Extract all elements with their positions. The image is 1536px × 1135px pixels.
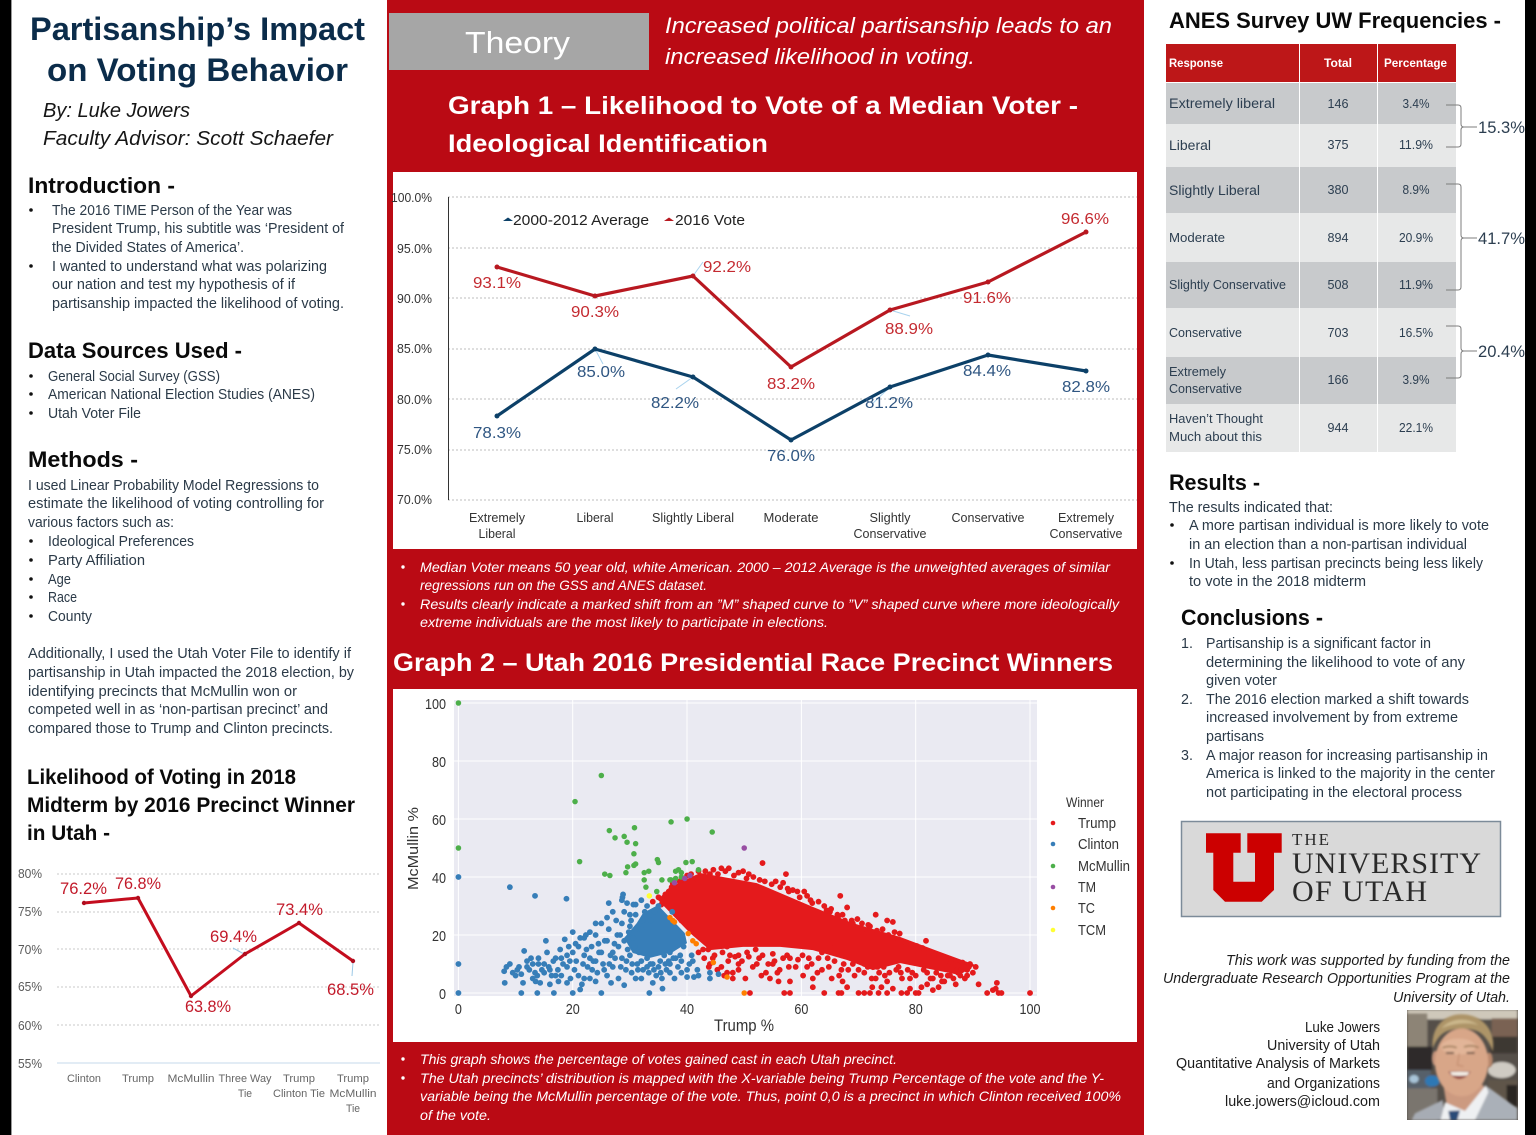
bracket: 15.3% [1446,105,1525,147]
text block: conclusions: 1. [1181,636,1193,652]
text block: methods: compared those to Trump and Clinton precincts. [28,721,333,737]
legend: 2016 Vote [675,212,745,229]
table: ANES frequencies: Conservative [1169,325,1242,340]
heading: conclusions: Conclusions - [1181,605,1323,630]
text block: funding acknowledgement: Undergraduate Research Opportunities Program at the [1163,971,1510,987]
text block: conclusions: not participating in the electoral process [1206,785,1462,801]
scatter plot: graph 2: 0 [439,986,446,1003]
scatter plot: graph 2: 80 [909,1001,923,1018]
line chart: 2018 midterm likelihood: 70% [18,943,42,957]
text block: methods: estimate the likelihood of voting controlling for [28,496,324,512]
scatter plot: graph 2: 40 [680,1001,694,1018]
legend: TC [1078,900,1095,917]
series: 2000-2012 average [494,346,1088,442]
scatter plot: graph 2: 40 [432,870,446,887]
theory statement [665,13,1112,69]
text block: conclusions: partisans [1206,729,1264,745]
table: ANES frequencies: 22.1% [1399,421,1433,435]
text block: data sources list: American National Election Studies (ANES) [48,387,315,403]
series: 2016 vote [494,230,1088,370]
text block: data sources list [29,369,315,422]
title: on Voting Behavior [47,52,348,88]
text block: conclusions: determining the likelihood to vote of any [1206,655,1466,671]
line chart: graph 1: 85.0% [397,342,432,356]
line chart: 2018 midterm likelihood: 76.2% [60,880,107,898]
bracket: 20.4%: 20.4% [1478,342,1525,361]
text block: contact: luke.jowers@icloud.com [1225,1094,1380,1110]
legend [1051,794,1130,939]
text block: conclusions: 3. [1181,748,1193,764]
table: ANES frequencies: 3.9% [1402,373,1430,387]
title: Partisanship’s Impact [30,11,365,47]
line chart: graph 1: 91.6% [963,290,1011,307]
portrait [1407,1010,1518,1120]
line chart: graph 1: 80.0% [397,393,432,407]
scatter plot: graph 2: 20 [432,928,446,945]
table: ANES frequencies [1166,44,1456,452]
title [30,11,365,88]
text block: contact: and Organizations [1267,1076,1380,1092]
bracket: 41.7% [1446,184,1525,290]
line chart: graph 1: 90.3% [571,304,619,321]
line chart: graph 1: 95.0% [397,242,432,256]
theory badge: Theory [465,25,571,60]
line chart: graph 1: Slightly [870,511,911,525]
bracket: 41.7%: 41.7% [1478,229,1525,248]
text block: methods: I used Linear Probability Model Regressions to [28,478,319,494]
panel: center red [387,0,1144,1135]
table: ANES frequencies: 11.9% [1399,278,1433,292]
theory statement: increased likelihood in voting. [665,44,975,69]
text block: methods: identifying precincts that McMullin won or [28,684,297,700]
table: ANES frequencies: 894 [1328,231,1349,245]
table: ANES frequencies: 375 [1328,138,1349,152]
text block: conclusions: Partisanship is a significant factor in [1206,636,1431,652]
scatter plot: graph 2: 60 [794,1001,808,1018]
bracket: 15.3%: 15.3% [1478,118,1525,137]
text block: graph 2 notes [401,1051,1121,1123]
table: ANES frequencies: 703 [1328,326,1349,340]
heading: data sources: Data Sources Used - [28,338,242,363]
legend: Winner [1066,794,1104,810]
table: ANES frequencies: Total [1324,56,1352,70]
line chart: 2018 midterm likelihood: Trump [122,1073,154,1085]
text block: graph 1 notes: Results clearly indicate a marked shift from an ”M” shaped curve to ”V” shaped curve where more ideologically [420,596,1120,612]
line chart: 2018 midterm likelihood [18,867,380,1115]
text block: introduction bullets: our nation and test my hypothesis of if [52,277,295,293]
text block: conclusions: given voter [1206,673,1277,689]
legend [503,212,745,229]
logo: University of Utah: OF UTAH [1292,875,1427,908]
line chart: graph 1: Liberal [576,511,614,525]
scatter plot: graph 2: 100 [425,696,446,713]
text block: funding acknowledgement: University of Utah. [1393,990,1510,1006]
legend: TCM [1078,922,1106,939]
heading: methods: Methods - [28,447,138,472]
line chart: 2018 midterm likelihood: 68.5% [327,981,374,999]
line chart: graph 1 [391,172,1137,549]
text block: results: The results indicated that: [1169,500,1333,516]
text block: methods: competed well in as ‘non-partisan precinct’ and [28,702,328,718]
text block: graph 2 notes: variable being the McMullin percentage of the vote. Thus, point 0,0 is a precinct in which Clinton received 100% [420,1088,1121,1104]
line chart: graph 1: Slightly Liberal [652,511,734,525]
table: ANES frequencies: 16.5% [1399,326,1433,340]
text block: graph 2 notes: This graph shows the percentage of votes gained cast in each Utah precinct. [420,1051,897,1067]
text block: methods [28,478,355,737]
line chart: 2018 midterm likelihood: 80% [18,867,42,881]
theory badge [389,13,649,70]
line chart: graph 1: Moderate [764,511,819,525]
line chart: graph 1: 96.6% [1061,211,1109,228]
line chart: graph 1: 76.0% [767,448,815,465]
line chart: graph 1: Extremely [469,511,526,525]
table: ANES frequencies: Extremely liberal [1169,96,1275,111]
heading: likelihood of voting chart: in Utah - [27,822,110,845]
text block: methods: various factors such as: [28,515,174,531]
scatter plot: graph 2: 20 [566,1001,580,1018]
line chart: 2018 midterm likelihood: Three Way [218,1073,272,1085]
heading: likelihood of voting chart: Likelihood of Voting in 2018 [27,766,296,789]
text block: conclusions: America is linked to the majority in the center [1206,766,1495,782]
text block: methods: Ideological Preferences [48,534,194,550]
table: ANES frequencies: Response [1169,56,1223,70]
line chart: 2018 midterm likelihood: 60% [18,1019,42,1033]
scatter plot: graph 2: 100 [1020,1001,1040,1018]
text block: graph 1 notes: regressions run on the GSS and ANES dataset. [420,577,707,593]
text block: conclusions: 2. [1181,692,1193,708]
table: ANES frequencies: Liberal [1169,138,1211,153]
heading: introduction: Introduction - [28,173,175,198]
logo: University of Utah: THE [1292,830,1329,849]
line chart: graph 1: Extremely [1058,511,1115,525]
line chart: graph 1: 93.1% [473,275,521,292]
table: ANES frequencies: Percentage [1384,56,1447,70]
line chart: graph 1: 84.4% [963,363,1011,380]
line chart: graph 1: Conservative [952,511,1025,525]
line chart: graph 1: 83.2% [767,376,815,393]
text block: contact [1176,1020,1380,1110]
text block: introduction bullets: The 2016 TIME Person of the Year was [52,203,292,219]
heading: graph 1 [448,92,1078,158]
logo: University of Utah [1182,822,1500,916]
scatter plot: graph 2: 0 [455,1001,462,1018]
text block: graph 1 notes: Median Voter means 50 year old, white American. 2000 – 2012 Average is the unweighted averages of similar [420,559,1111,575]
line chart: 2018 midterm likelihood: McMullin [330,1088,376,1100]
table: ANES frequencies: Haven’t Thought [1169,411,1263,426]
text block: methods: partisanship in Utah impacted the 2018 election, by [28,665,355,681]
heading: graph 1: Ideological Identification [448,130,768,158]
panel: right column [1163,8,1525,1125]
table: ANES frequencies: Slightly Conservative [1169,277,1286,292]
line chart: graph 1: Conservative [854,527,927,541]
line chart: 2018 midterm likelihood: Clinton [67,1073,101,1085]
theory statement: Increased political partisanship leads to an [665,13,1112,38]
table: ANES frequencies: 166 [1328,373,1349,387]
line chart: 2018 midterm likelihood: Trump [283,1073,315,1085]
scatter plot: graph 2: Trump % [714,1016,774,1035]
text block: introduction bullets [29,203,344,312]
table: ANES frequencies: 508 [1328,278,1349,292]
table: ANES frequencies: Extremely [1169,364,1226,379]
line chart: 2018 midterm likelihood: 55% [18,1057,42,1071]
heading: likelihood of voting chart [27,766,355,845]
line chart: graph 1: 78.3% [473,425,521,442]
text block: graph 2 notes: of the vote. [420,1107,491,1123]
text block: introduction bullets: the Divided States of America’. [52,240,244,256]
authors: Faculty Advisor: Scott Schaefer [43,127,334,150]
heading: likelihood of voting chart: Midterm by 2016 Precinct Winner [27,794,355,817]
bracket: 20.4% [1446,326,1525,378]
line chart: graph 1: 75.0% [397,443,432,457]
line chart: 2018 midterm likelihood: 65% [18,980,42,994]
line chart: graph 1: Liberal [478,527,516,541]
line chart: graph 1: 90.0% [397,292,432,306]
dots [458,703,1030,993]
text block: graph 1 notes [401,559,1120,630]
legend: TM [1078,879,1096,896]
table: ANES frequencies: 8.9% [1402,183,1430,197]
text block: methods: Race [48,590,77,606]
line chart: graph 1: 100.0% [391,191,432,205]
logo: University of Utah: UNIVERSITY [1292,847,1481,880]
line chart: 2018 midterm likelihood: 75% [18,905,42,919]
text block: conclusions [1181,636,1495,801]
authors: By: Luke Jowers [43,99,190,122]
text block: methods: Age [48,572,71,588]
line chart: graph 1: 82.8% [1062,379,1110,396]
legend: Clinton [1078,836,1119,853]
line chart: 2018 midterm likelihood: 76.8% [115,875,161,893]
text block: graph 1 notes: extreme individuals are the most likely to participate in elections. [420,614,828,630]
scatter plot: graph 2: 60 [432,812,446,829]
table: ANES frequencies: 20.9% [1399,231,1433,245]
text block: contact: Luke Jowers [1305,1020,1380,1036]
text block: results: In Utah, less partisan precincts being less likely [1189,556,1484,572]
table: ANES frequencies: 146 [1328,97,1349,111]
line chart: 2018 midterm likelihood: Trump [337,1073,369,1085]
line chart: 2018 midterm likelihood: 73.4% [276,901,323,919]
line chart: 2018 midterm likelihood: 63.8% [185,998,231,1016]
legend: McMullin [1078,858,1130,875]
table: ANES frequencies: Moderate [1169,230,1225,245]
scatter plot: graph 2: 80 [432,754,446,771]
panel: left column [18,11,380,1115]
text block: methods: Party Affiliation [48,553,145,569]
line chart: 2018 midterm likelihood: McMullin [168,1073,214,1085]
table: ANES frequencies: 380 [1328,183,1349,197]
text block: results: A more partisan individual is more likely to vote [1189,518,1489,534]
line chart: 2018 midterm likelihood: Tie [238,1088,252,1100]
scatter plot: graph 2: McMullin % [406,807,422,890]
legend: Trump [1078,815,1116,832]
table: ANES frequencies: Much about this [1169,429,1262,444]
authors [43,99,334,150]
text block: data sources list: Utah Voter File [48,406,141,422]
text block: introduction bullets: partisanship impacted the likelihood of voting. [52,296,344,312]
text block: conclusions: increased involvement by from extreme [1206,710,1458,726]
text block: results [1169,500,1489,590]
heading: graph 2: Graph 2 – Utah 2016 Presidential Race Precinct Winners [393,649,1113,677]
line chart: 2018 midterm likelihood: Clinton Tie [273,1088,325,1100]
line chart: graph 1: 81.2% [865,395,913,412]
text block: results: to vote in the 2018 midterm [1189,574,1366,590]
table: ANES frequencies: Conservative [1169,381,1242,396]
line chart: 2018 midterm likelihood: 69.4% [210,928,257,946]
line chart: graph 1: 88.9% [885,321,933,338]
text block: funding acknowledgement [1163,953,1510,1006]
table: ANES frequencies: 3.4% [1402,97,1430,111]
text block: conclusions: The 2016 election marked a shift towards [1206,692,1469,708]
line chart: graph 1: 70.0% [397,493,432,507]
scatter plot: graph 2 [393,689,1137,1042]
line chart: graph 1: 92.2% [703,259,751,276]
legend: 2000-2012 Average [513,212,649,229]
heading: ANES frequencies: ANES Survey UW Frequencies - [1169,8,1501,33]
text block: graph 2 notes: The Utah precincts’ distribution is mapped with the X-variable being Trump Percentage of the vote and the Y- [420,1070,1104,1086]
table: ANES frequencies: Slightly Liberal [1169,183,1260,198]
text block: introduction bullets: I wanted to understand what was polarizing [52,259,327,275]
heading: graph 1: Graph 1 – Likelihood to Vote of a Median Voter - [448,92,1078,120]
line chart: graph 1: 82.2% [651,395,699,412]
heading: results: Results - [1169,470,1260,495]
text block: data sources list: General Social Survey (GSS) [48,369,220,385]
text block: results: in an election than a non-partisan individual [1189,537,1467,553]
text block: methods: County [48,609,93,625]
text block: methods: Additionally, I used the Utah Voter File to identify if [28,646,351,662]
text block: introduction bullets: President Trump, his subtitle was ‘President of [52,221,344,237]
line chart: graph 1: Conservative [1050,527,1123,541]
text block: contact: Quantitative Analysis of Markets [1176,1056,1380,1072]
text block: funding acknowledgement: This work was supported by funding from the [1226,953,1510,969]
text block: contact: University of Utah [1267,1038,1380,1054]
text block: conclusions: A major reason for increasing partisanship in [1206,748,1488,764]
table: ANES frequencies: 944 [1328,421,1349,435]
line chart: 2018 midterm likelihood: Tie [346,1103,360,1115]
line chart: graph 1: 85.0% [577,364,625,381]
table: ANES frequencies: 11.9% [1399,138,1433,152]
